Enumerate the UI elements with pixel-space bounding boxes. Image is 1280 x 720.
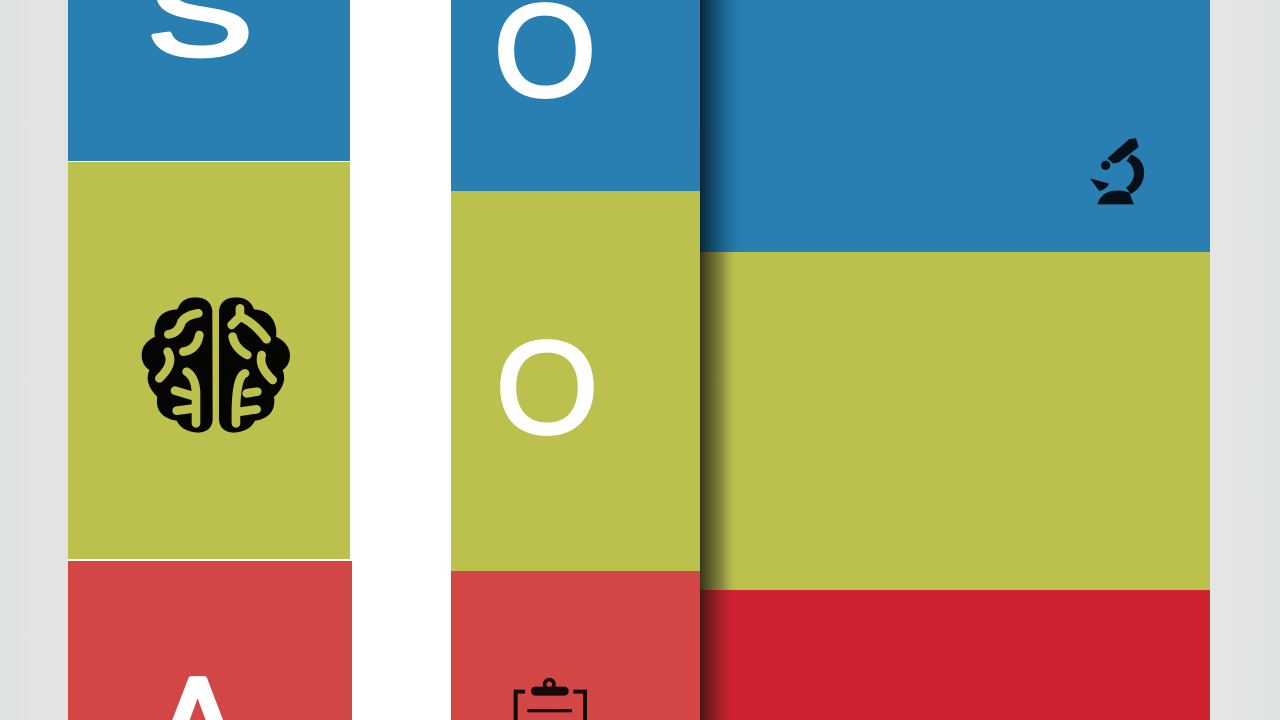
icon: clipboard	[516, 680, 585, 720]
icon: brain	[142, 297, 290, 433]
red band	[700, 590, 1210, 720]
green band	[700, 252, 1210, 590]
icon: microscope	[1090, 138, 1144, 204]
panel: right column	[700, 0, 1210, 720]
green block with brain icon	[68, 162, 350, 559]
blue band with microscope icon	[700, 0, 1210, 252]
red block with clipboard icon	[451, 571, 700, 720]
green block with letter O: O	[496, 314, 598, 461]
green block with letter O	[451, 191, 700, 571]
blue block with letter O	[451, 0, 700, 191]
panel: left column	[68, 0, 352, 720]
blue block with letter S	[68, 0, 350, 161]
red block with letter A	[68, 561, 352, 720]
panel: middle column	[451, 0, 700, 720]
